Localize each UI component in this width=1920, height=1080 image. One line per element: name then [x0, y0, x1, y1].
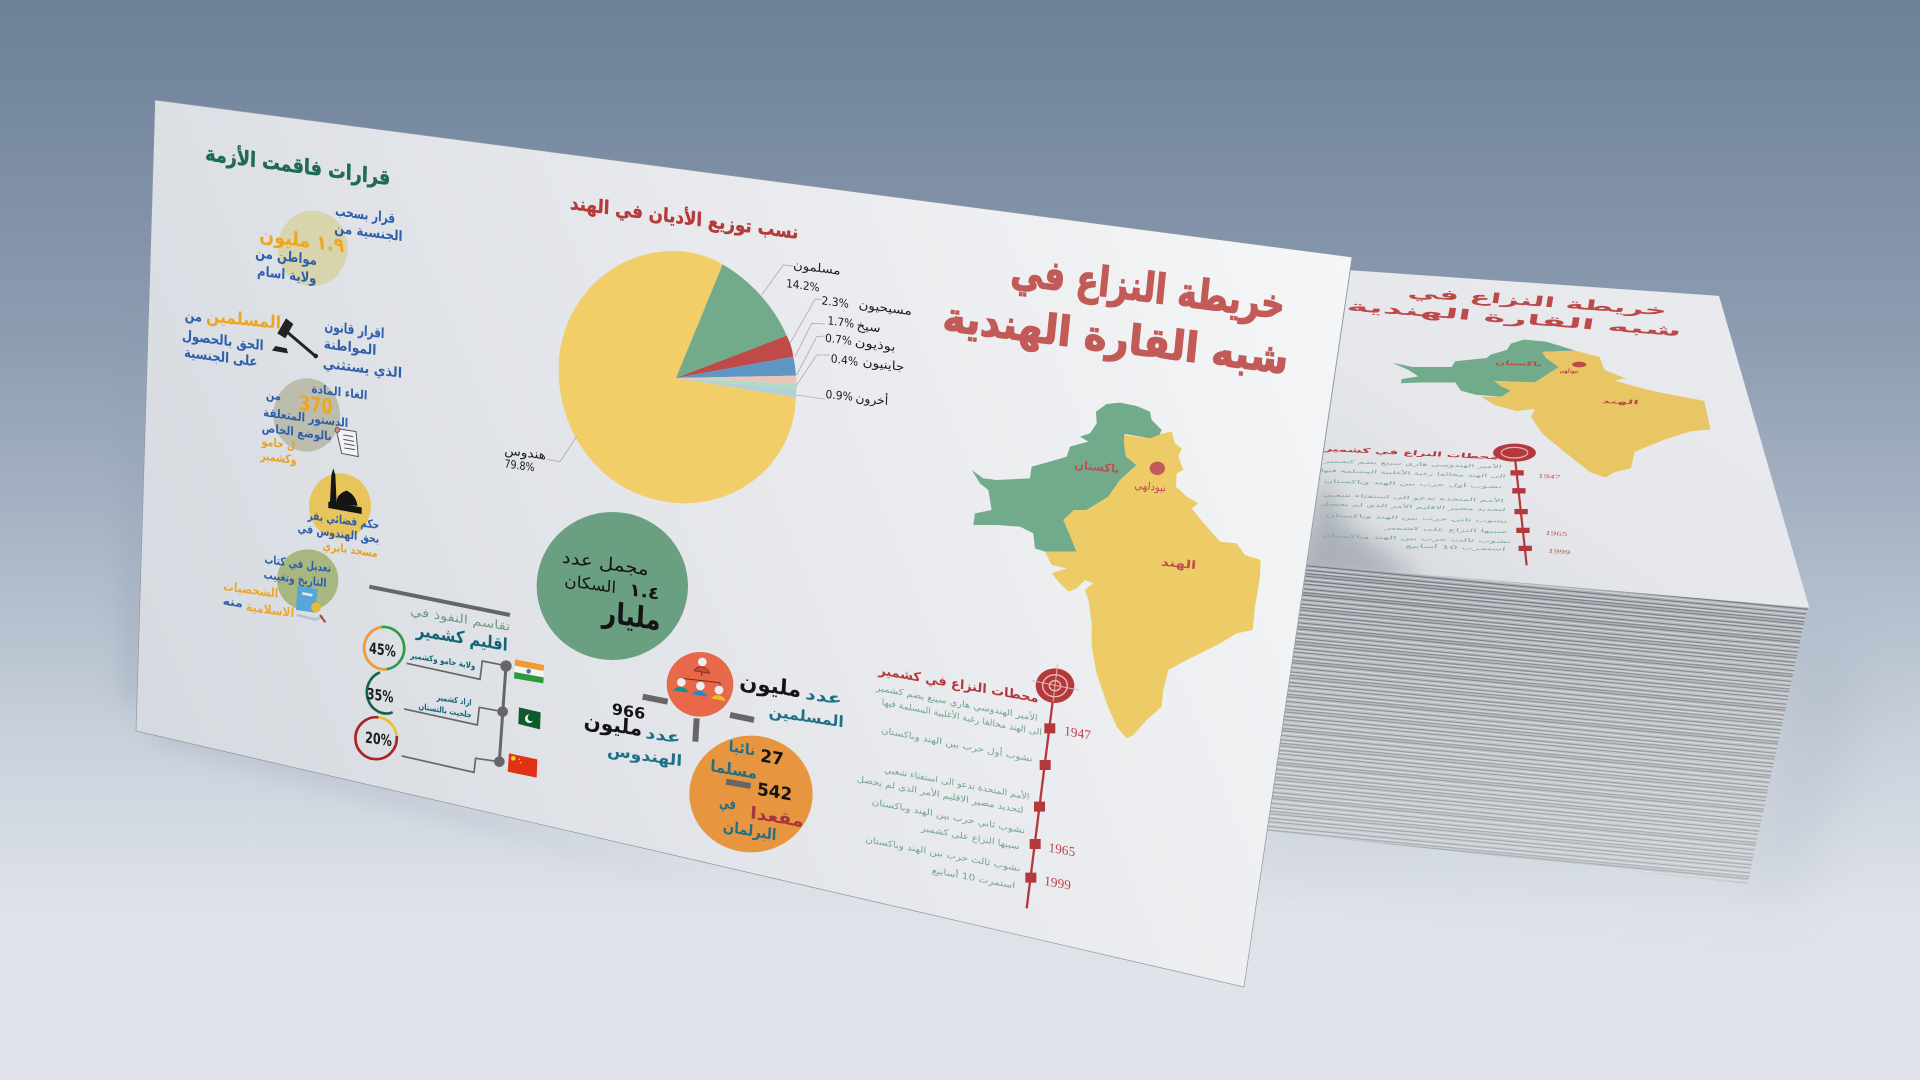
item: citizenship withdrawal: ولاية اسام — [257, 264, 317, 287]
pie chart — [559, 251, 797, 503]
map labels: باكستان — [1074, 457, 1120, 476]
back timeline: 1999 — [1548, 547, 1572, 556]
timeline text: الأمير الهندوسي هاري سينغ يضم كشمير — [875, 681, 1038, 724]
item: history revision: منه — [223, 594, 243, 610]
back timeline: محطات النزاع في كشمير — [1322, 445, 1499, 461]
flag: India — [514, 659, 544, 683]
circle: parliament seats — [689, 736, 813, 852]
timeline text: لتحديد مصير الاقليم الأمر الذي لم يحصل — [857, 773, 1024, 816]
circle: parliament seats: البرلمان — [722, 817, 777, 844]
item: citizenship law: الحق بالحصول — [182, 328, 264, 354]
shadow of front card — [120, 300, 700, 880]
panel: front sheet — [136, 100, 1352, 987]
pie labels: سيخ — [856, 318, 881, 335]
item: citizenship withdrawal: مواطن من — [255, 245, 317, 269]
back timeline — [1320, 444, 1572, 565]
labels: region names: جلجيت بالتستان — [418, 701, 472, 720]
back map: باكستان — [1495, 359, 1542, 367]
circle: parliament seats: مقعدا — [750, 802, 804, 831]
back map — [1392, 340, 1711, 478]
labels: region names: ازاد كشمير — [436, 692, 472, 709]
leader lines — [547, 265, 830, 462]
map of Pakistan and India — [972, 403, 1261, 738]
heading: influence division: تقاسم النفوذ في — [410, 604, 510, 635]
labels: region names — [409, 650, 475, 720]
circle: parliament seats: مسلما — [710, 756, 758, 783]
item: history revision: الاسلامية — [246, 599, 294, 620]
item: article 370 — [259, 378, 368, 468]
heading: decisions: قرارات فاقمت الأزمة — [205, 139, 391, 190]
years — [1044, 723, 1092, 893]
icon: organisation people — [667, 652, 733, 717]
item: citizenship law — [182, 306, 402, 383]
back timeline: استمرت 10 أسابيع — [1405, 543, 1506, 552]
timeline markers — [1025, 723, 1055, 883]
back timeline: 1947 — [1538, 472, 1562, 480]
pie labels: مسلمون — [793, 258, 841, 279]
ring: 45 percent — [364, 627, 404, 669]
item: citizenship law: على الجنسية — [184, 345, 258, 370]
floor shadow — [1250, 608, 1860, 900]
text: hindu count: 966 — [611, 700, 646, 723]
timeline text: نشوب ثالث حرب بين الهند وباكستان — [865, 835, 1021, 874]
panel: decisions column — [182, 139, 403, 539]
item: history revision: التاريخ وتغييب — [264, 567, 327, 591]
text: muslim count — [739, 669, 844, 731]
main title — [941, 246, 1291, 384]
map labels: الهند — [1161, 555, 1197, 572]
timeline text: نشوب أول حرب بين الهند وباكستان — [881, 724, 1033, 765]
ring: 20 percent — [355, 717, 397, 759]
panel: religion pie chart — [504, 191, 912, 503]
labels: region names: ولاية جامو وكشمير — [409, 650, 475, 672]
back timeline: نشوب ثاني حرب بين الهند وباكستان — [1326, 512, 1508, 524]
timeline text — [857, 681, 1042, 892]
pie labels: 0.9% — [825, 387, 853, 404]
pie labels: 79.8% — [504, 456, 535, 474]
item: citizenship withdrawal: ١.٩ مليون — [259, 223, 345, 257]
item: citizenship law: المواطنة — [324, 336, 377, 359]
item: mosque ruling — [309, 468, 371, 539]
item: citizenship law: الذي يستثني — [323, 356, 402, 383]
icon: book — [296, 585, 325, 622]
item: citizenship withdrawal: قرار بسحب — [335, 203, 395, 227]
circle: total population — [537, 512, 688, 660]
text: mosque ruling: حكم قضائي بقر — [307, 508, 379, 533]
text: mosque ruling: بحق الهندوس في — [297, 521, 379, 547]
timeline text: الى الهند مخالفا رغبة الأغلبية المسلمة فيها — [882, 696, 1042, 738]
back title: خريطة النزاع في — [1407, 284, 1668, 319]
timeline text: الأمم المتحدة تدعو الى استفتاء شعبي — [884, 763, 1030, 803]
marker: New Delhi — [1150, 462, 1165, 475]
item: article 370: وكشمير — [259, 448, 297, 468]
item: history revision — [223, 549, 338, 622]
text: mosque ruling: مسجد بابري — [322, 539, 378, 561]
circle: total population: مليار — [600, 595, 662, 637]
heading: kashmir region: اقليم كشمير — [415, 621, 508, 656]
years: 1999 — [1044, 873, 1072, 893]
ring: 35 percent — [367, 672, 394, 713]
icon: gavel — [272, 318, 318, 358]
back timeline: 1965 — [1545, 529, 1569, 538]
panel: stacked sheets behind — [1267, 270, 1809, 884]
circle: total population: مجمل عدد — [561, 548, 649, 580]
back map: نيودلهي — [1559, 367, 1579, 375]
top sheet — [1307, 270, 1809, 608]
pie labels: بوذيون — [855, 335, 896, 355]
back timeline: الأمم المتحدة تدعو الى استفتاء شعبي — [1322, 492, 1504, 503]
item: article 370: الدستور المتعلقة — [263, 405, 348, 431]
circle: parliament seats: نائبا — [728, 738, 756, 760]
item: citizenship law: اقرار قانون — [324, 318, 385, 342]
back map: الهند — [1601, 398, 1640, 406]
item: article 370: ل جامو — [261, 434, 295, 453]
icon: scroll — [335, 428, 358, 457]
pie labels: 2.3% — [821, 293, 849, 311]
text: muslim count: المسلمين — [768, 702, 844, 731]
years: 1947 — [1064, 723, 1092, 743]
text: hindu count: مليون — [583, 708, 643, 741]
pie labels: هندوس — [504, 443, 546, 463]
stack side — [1267, 564, 1809, 884]
circle: total population: السكان — [564, 571, 617, 597]
ring: 35 percent: 35% — [367, 685, 394, 707]
pie labels: أخرون — [855, 390, 888, 409]
item: article 370: من — [266, 387, 281, 403]
pie labels: مسيحيون — [858, 297, 912, 319]
pie labels: 0.4% — [831, 351, 859, 369]
years: 1965 — [1048, 840, 1076, 859]
text: hindu count: الهندوس — [607, 741, 683, 770]
ring: 20 percent: 20% — [365, 729, 392, 750]
panel: population figures — [537, 512, 844, 852]
back timeline: لتحديد مصير الاقليم الأمر الذي لم يحصل — [1320, 501, 1506, 512]
pie labels: جاينيون — [862, 355, 905, 375]
connector dashes — [643, 697, 754, 742]
panel: rulings and kashmir division — [223, 508, 544, 778]
back timeline: سببها النزاع على كشمير — [1383, 525, 1508, 534]
pie labels: 0.7% — [825, 331, 852, 348]
text: muslim count: مليون — [739, 669, 802, 703]
timeline text: نشوب ثاني حرب بين الهند وباكستان — [872, 797, 1025, 837]
item: article 370: الغاء المادة — [311, 381, 368, 403]
back title: شبه القارة الهندية — [1345, 298, 1683, 340]
item: history revision: الشخصيات — [223, 578, 278, 601]
text: mosque ruling — [297, 508, 379, 561]
back timeline: الى الهند مخالفا رغبة الأغلبية المسلمة فيها — [1320, 467, 1506, 479]
panel: title and map — [941, 246, 1291, 738]
item: citizenship withdrawal — [255, 203, 403, 287]
main title: خريطة النزاع في — [1009, 246, 1287, 329]
divider bar — [369, 587, 510, 615]
item: article 370: 370 — [299, 391, 333, 419]
back timeline: نشوب أول حرب بين الهند وباكستان — [1324, 478, 1502, 489]
flag: Pakistan — [518, 707, 541, 729]
circle: parliament seats: 542 — [757, 780, 793, 806]
circle: total population: ١.٤ — [629, 580, 660, 605]
map labels — [1074, 457, 1197, 572]
circle: parliament seats: 27 — [760, 746, 784, 770]
shadow from front card — [1308, 478, 1418, 574]
item: article 370: بالوضع الخاص — [262, 420, 332, 445]
back timeline: الأمير الهندوسي هاري سينغ يضم كشمير — [1322, 458, 1502, 469]
timeline line — [1027, 702, 1053, 908]
main title: شبه القارة الهندية — [941, 293, 1291, 384]
text: hindu count: عدد — [645, 724, 681, 747]
timeline text: استمرت 10 أسابيع — [932, 864, 1015, 892]
back timeline: نشوب ثالث حرب بين الهند وباكستان — [1322, 532, 1512, 544]
ring: 45 percent: 45% — [369, 639, 396, 661]
item: citizenship withdrawal: الجنسية من — [334, 220, 403, 245]
text: hindu count — [583, 700, 683, 770]
pie labels: 14.2% — [786, 276, 820, 295]
map labels: نيودلهي — [1134, 478, 1167, 495]
icon: mosque — [328, 468, 362, 514]
pie labels — [504, 258, 912, 474]
item: history revision: تعديل في كتاب — [264, 552, 331, 575]
pie labels: 1.7% — [827, 313, 855, 331]
heading: religion shares: نسب توزيع الأديان في الهند — [570, 191, 799, 244]
text: muslim count: عدد — [805, 685, 842, 708]
connectors — [402, 660, 512, 772]
item: citizenship law: من — [185, 308, 202, 326]
flag: China — [508, 753, 537, 778]
item: citizenship law: المسلمين — [206, 306, 281, 334]
icon: target — [1032, 664, 1079, 707]
back title — [1345, 284, 1683, 340]
panel: Kashmir timeline — [857, 663, 1092, 908]
circle: parliament seats: في — [719, 793, 736, 815]
timeline text: سببها النزاع على كشمير — [920, 824, 1020, 852]
heading: conflict milestones: محطات النزاع في كشمير — [877, 663, 1039, 706]
